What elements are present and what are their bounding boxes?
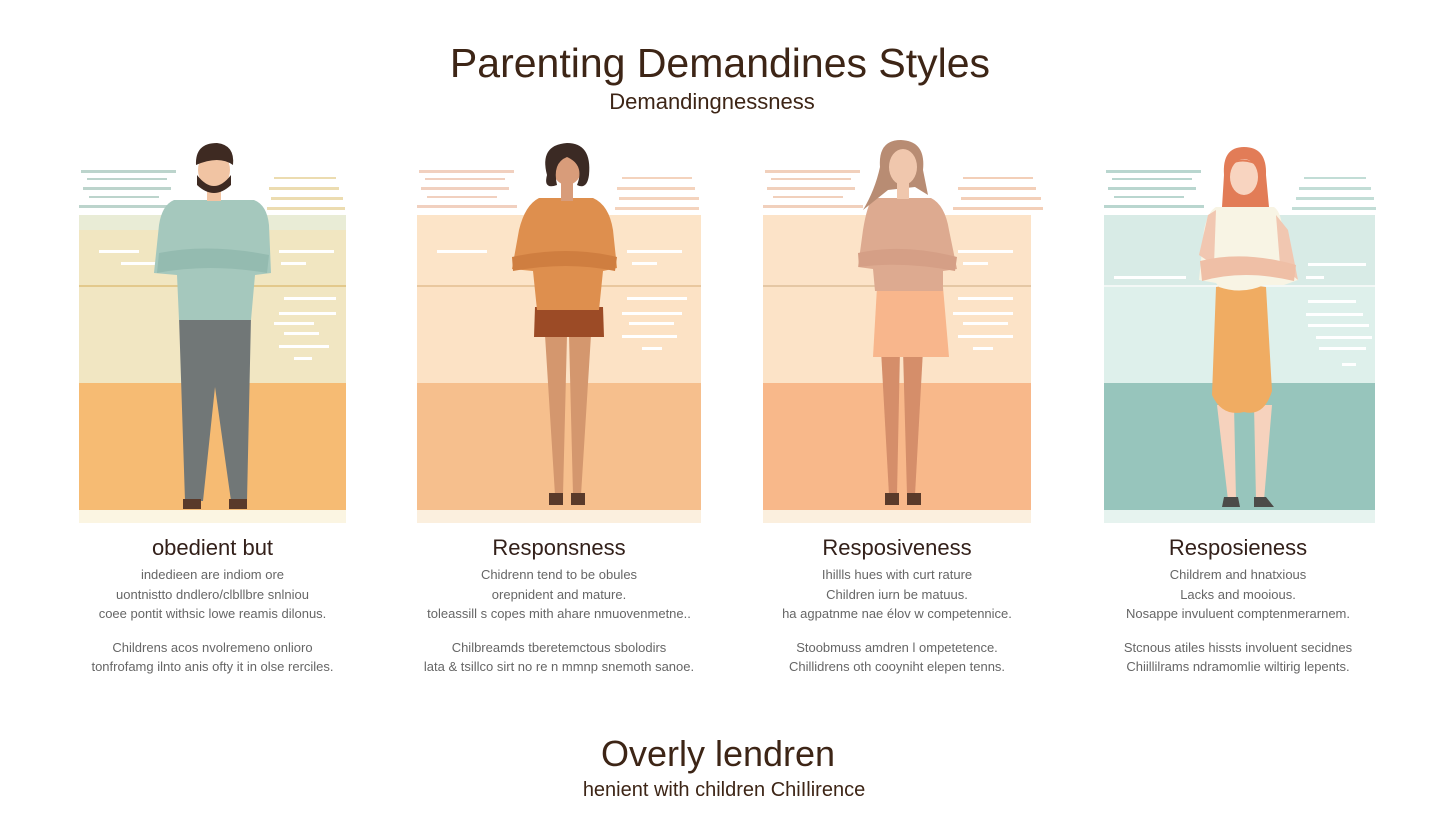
title: Parenting Demandines Styles xyxy=(450,40,990,86)
panel: 2 text xyxy=(424,535,694,674)
panel: 3 xyxy=(763,140,1043,523)
heading 4: Resposieness xyxy=(1169,535,1307,560)
figure: man xyxy=(154,143,271,509)
body 4: Nosappe invuluent comptenmerarnem. xyxy=(1126,606,1350,621)
body 1: coee pontit withsic lowe reamis dilonus. xyxy=(99,606,326,621)
body 1: tonfrofamg ilnto anis ofty it in olse rerciles. xyxy=(91,659,334,674)
body 3: Stoobmuss amdren l ompetetence. xyxy=(796,640,998,654)
body 3: Chillidrens oth cooyniht elepen tenns. xyxy=(789,659,1005,674)
panel: 4 text xyxy=(1124,535,1352,674)
bottom subtitle: henient with children ChiIlirence xyxy=(583,779,865,801)
body 2: Chilbreamds tberetemctous sbolodirs xyxy=(452,640,666,654)
panel: 4 xyxy=(1104,147,1376,523)
body 1: Childrens acos nvolremeno onlioro xyxy=(112,640,313,654)
figure: woman red hair xyxy=(1199,147,1298,507)
body 1 xyxy=(91,567,334,674)
body 3 xyxy=(782,567,1012,674)
panel: 1 xyxy=(79,143,346,523)
body 1: uontnistto dndlero/clbllbre snlniou xyxy=(116,586,309,602)
heading 2: Responsness xyxy=(492,535,626,560)
body 3: Ihillls hues with curt rature xyxy=(822,567,972,582)
body 4: Stcnous atiles hissts involuent secidnes xyxy=(1124,640,1352,654)
body 2: toleassill s copes mith ahare nmuovenmetne.. xyxy=(427,606,691,621)
figure: woman beige xyxy=(858,140,957,505)
body 2 xyxy=(424,567,694,674)
panel: 3 text xyxy=(782,535,1012,674)
body 2: Chidrenn tend to be obules xyxy=(481,567,637,582)
panel: 1 text xyxy=(91,535,334,674)
heading 3: Resposiveness xyxy=(822,535,972,560)
body 1: indedieen are indiom ore xyxy=(141,567,284,582)
body 2: lata & tsillco sirt no re n mmnp snemoth sanoe. xyxy=(424,659,694,674)
body 4: Childrem and hnatxious xyxy=(1170,567,1306,582)
bottom heading: Overly lendren xyxy=(601,733,835,774)
body 4: Lacks and mooious. xyxy=(1180,586,1296,602)
body 3: Children iurn be matuus. xyxy=(826,586,968,602)
heading 1: obedient but xyxy=(152,535,273,560)
body 4 xyxy=(1124,567,1352,674)
body 2: orepnident and mature. xyxy=(492,586,626,602)
body 4: Chiillilrams ndramomlie wiltirig lepents. xyxy=(1126,659,1350,674)
subtitle: Demandingnessness xyxy=(609,89,815,114)
panel: 2 xyxy=(417,143,701,523)
figure: woman orange xyxy=(512,143,617,505)
body 3: ha agpatnme nae élov w competennice. xyxy=(782,606,1012,621)
